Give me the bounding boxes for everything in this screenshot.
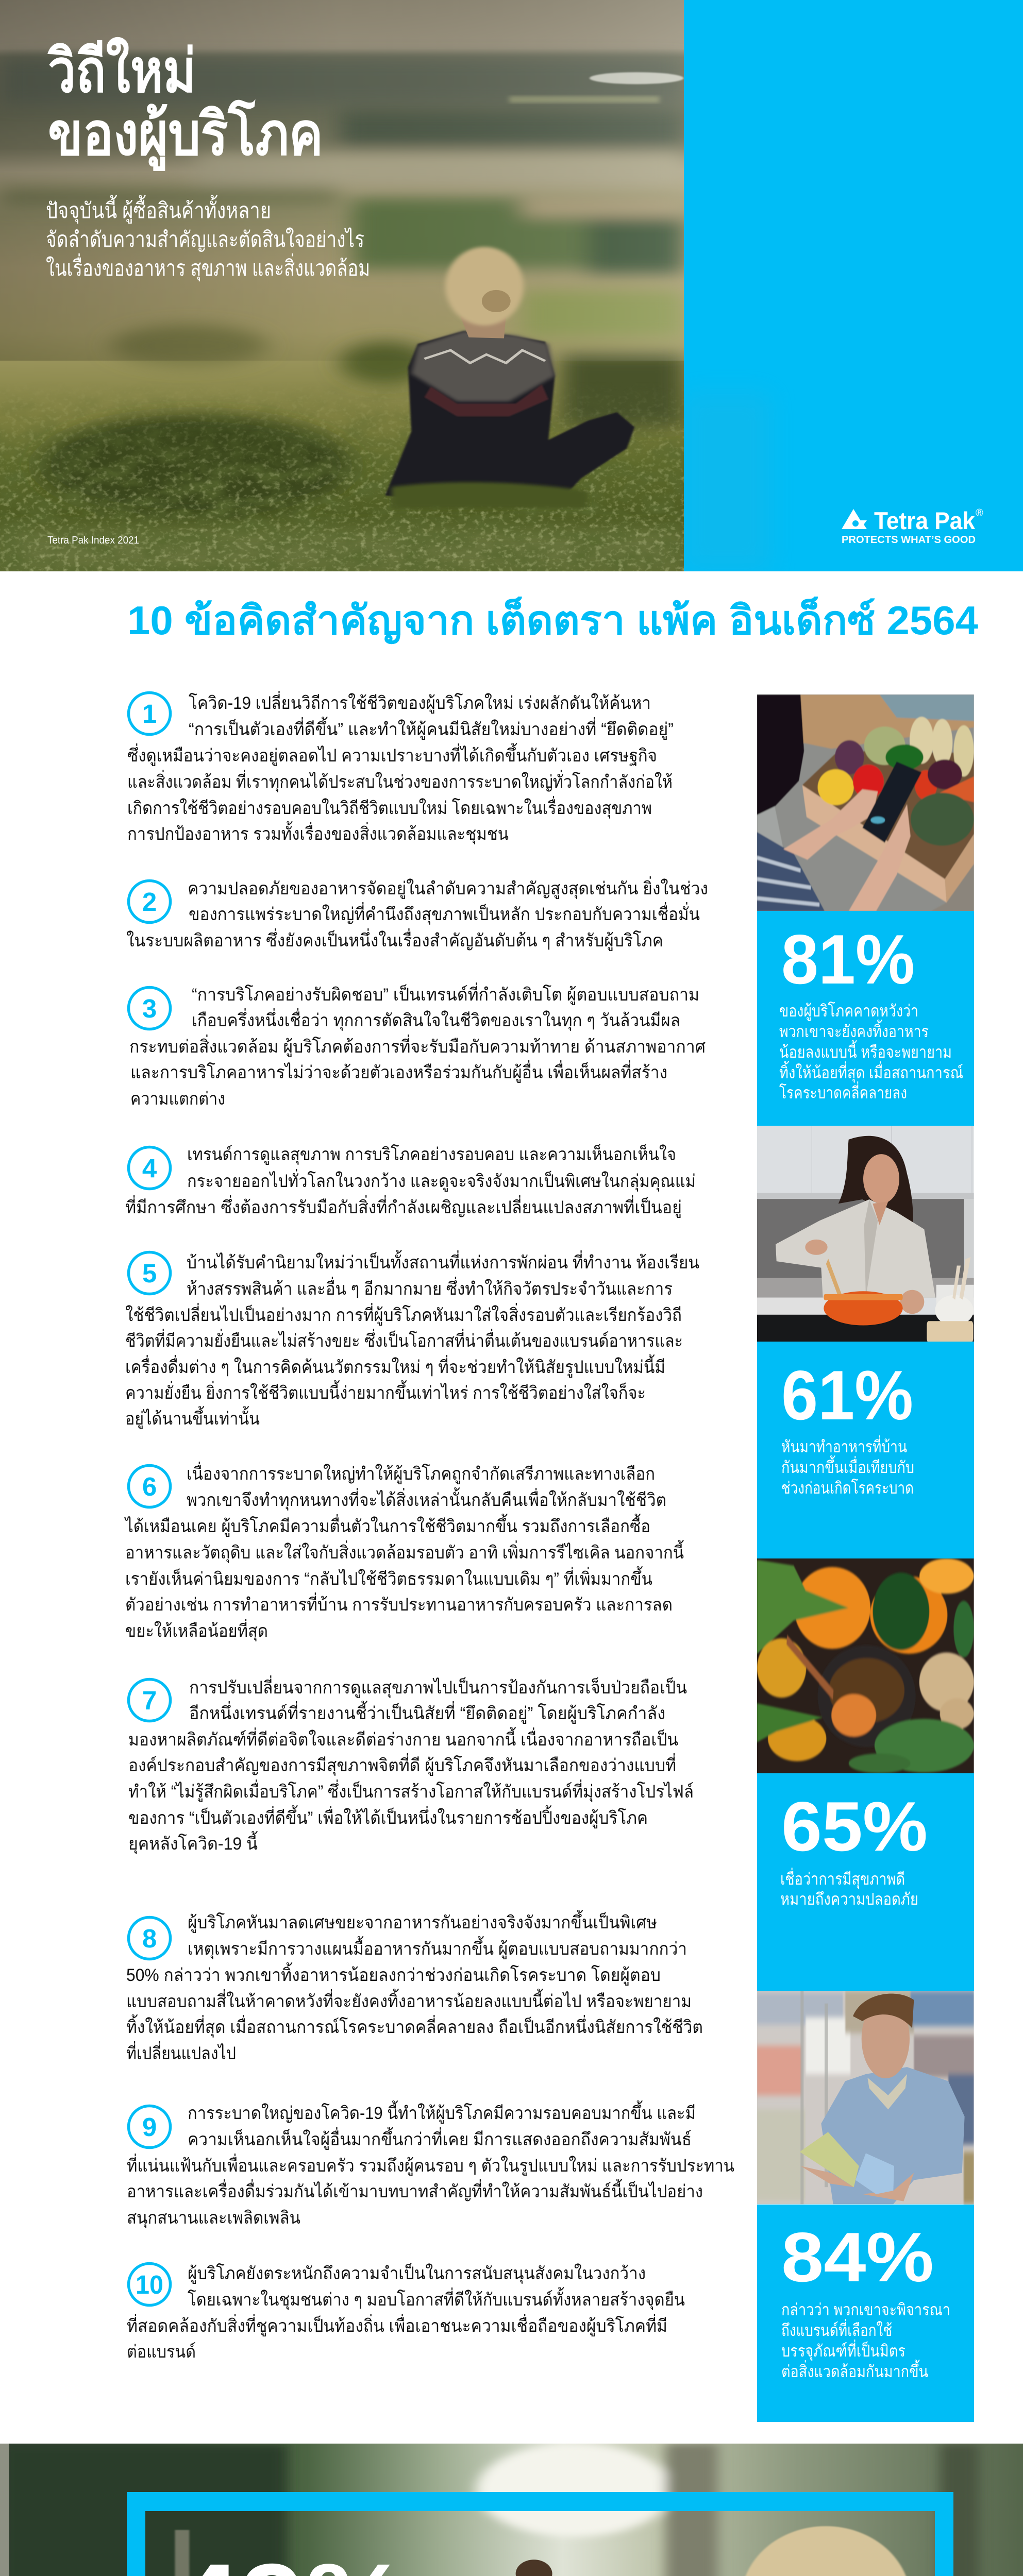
insight 7 (128, 1675, 694, 1854)
bottom photo: mother and children in garden (0, 2444, 1023, 2576)
number badge 10: 10 (136, 2270, 163, 2299)
insight 2 (126, 876, 708, 951)
stat 84%: กล่าวว่า พวกเขาจะพิจารณา (781, 2300, 950, 2319)
insight 7: อีกหนึ่งเทรนด์ที่รายงานชี้ว่าเป็นนิสัยที่ “ยึดติดอยู่” โดยผู้บริโภคกำลัง (189, 1701, 665, 1724)
Tetra Pak logo: ® (976, 507, 983, 519)
number badge 9: 9 (142, 2112, 157, 2142)
insight 7: การปรับเปลี่ยนจากการดูแลสุขภาพไปเป็นการป้องกันการเจ็บป่วยถือเป็น (189, 1675, 687, 1698)
Tetra Pak logo (842, 507, 983, 546)
number badge 2 (129, 881, 170, 922)
insight 1: โควิด-19 เปลี่ยนวิถีการใช้ชีวิตของผู้บริโภคใหม่ เร่งผลักดันให้ค้นหา (189, 691, 651, 714)
number badge 5 (129, 1252, 170, 1294)
insight 4: กระจายออกไปทั่วโลกในวงกว้าง และดูจะจริงจังมากเป็นพิเศษในกลุ่มคุณแม่ (187, 1169, 696, 1192)
hero title: ของผู้บริโภค (48, 99, 323, 171)
insight 9: การระบาดใหญ่ของโควิด-19 นี้ทำให้ผู้บริโภคมีความรอบคอบมากขึ้น และมี (188, 2100, 696, 2124)
source note: Tetra Pak Index 2021 (47, 535, 139, 546)
stat 61%: ช่วงก่อนเกิดโรคระบาด (781, 1479, 914, 1497)
stat 84%: บรรจุภัณฑ์ที่เป็นมิตร (781, 2340, 905, 2361)
Tetra Pak logo: Tetra Pak (874, 507, 976, 534)
insight 6 (124, 1462, 684, 1641)
insight 3: และการบริโภคอาหารไม่ว่าจะด้วยตัวเองหรือร่วมกันกับผู้อื่น เพื่อเห็นผลที่สร้าง (130, 1060, 667, 1083)
stat 81%: 81% (781, 920, 915, 998)
insight 5 (125, 1250, 699, 1429)
stat 81% (757, 911, 974, 1126)
insight 1: เกิดการใช้ชีวิตอย่างรอบคอบในวิถีชีวิตแบบใหม่ โดยเฉพาะในเรื่องของสุขภาพ (127, 796, 652, 819)
stat 65% (757, 1773, 974, 1991)
number badge 4 (129, 1147, 170, 1189)
hero subtitle: ปัจจุบันนี้ ผู้ซื้อสินค้าทั้งหลาย (46, 195, 271, 224)
insight 4 (125, 1144, 696, 1218)
insight 7: มองหาผลิตภัณฑ์ที่ดีต่อจิตใจและดีต่อร่างกาย นอกจากนี้ เนื่องจากอาหารถือเป็น (128, 1727, 678, 1750)
insight 6: ได้เหมือนเคย ผู้บริโภคมีความตื่นตัวในการใช้ชีวิตมากขึ้น รวมถึงการเลือกซื้อ (124, 1514, 650, 1537)
hero photo: woman overlooking countryside (0, 0, 684, 571)
insight 3: กระทบต่อสิ่งแวดล้อม ผู้บริโภคต้องการที่จะรับมือกับความท้าทาย ด้านสภาพอากาศ (129, 1035, 706, 1057)
stat 84%: ถึงแบรนด์ที่เลือกใช้ (781, 2319, 892, 2340)
insight 4: เทรนด์การดูแลสุขภาพ การบริโภคอย่างรอบคอบ และความเห็นอกเห็นใจ (187, 1144, 676, 1165)
insight 3: “การบริโภคอย่างรับผิดชอบ” เป็นเทรนด์ที่กำลังเติบโต ผู้ตอบแบบสอบถาม (192, 982, 699, 1005)
stat 84% (757, 2205, 974, 2422)
stat 81%: พวกเขาจะยังคงทิ้งอาหาร (779, 1020, 929, 1041)
stat 84%: ต่อสิ่งแวดล้อมกันมากขึ้น (781, 2360, 928, 2381)
blue photo frame (127, 2492, 953, 2576)
number badge 4: 4 (142, 1154, 157, 1183)
insight 1 (127, 691, 674, 844)
insight 5: อยู่ได้นานขึ้นเท่านั้น (125, 1406, 260, 1429)
hero subtitle: จัดลำดับความสำคัญและตัดสินใจอย่างไร (46, 227, 364, 252)
insight 10: โดยเฉพาะในชุมชนต่าง ๆ มอบโอกาสที่ดีให้กับแบรนด์ทั้งหลายสร้างจุดยืน (188, 2287, 685, 2310)
insight 8: แบบสอบถามสี่ในห้าคาดหวังที่จะยังคงทิ้งอาหารน้อยลงแบบนี้ต่อไป หรือจะพยายาม (126, 1989, 692, 2011)
stat 65%: หมายถึงความปลอดภัย (780, 1890, 918, 1908)
number badge 5: 5 (142, 1259, 157, 1288)
main heading: 10 ข้อคิดสำคัญจาก เต็ดตรา แพ้ค อินเด็กซ์ 2564 (127, 597, 978, 644)
insight 7: องค์ประกอบสำคัญของการมีสุขภาพจิตที่ดี ผู้บริโภคจึงหันมาเลือกของว่างแบบที่ (128, 1753, 676, 1776)
blue side panel (684, 0, 1023, 571)
hero title (47, 37, 323, 171)
stat 81%: ของผู้บริโภคคาดหวังว่า (779, 1002, 918, 1021)
insight 5: บ้านได้รับคำนิยามใหม่ว่าเป็นทั้งสถานที่แห่งการพักผ่อน ที่ทำงาน ห้องเรียน (187, 1250, 699, 1273)
insight 8: 50% กล่าวว่า พวกเขาทิ้งอาหารน้อยลงกว่าช่วงก่อนเกิดโรคระบาด โดยผู้ตอบ (126, 1962, 661, 1986)
insight 6: เนื่องจากการระบาดใหญ่ทำให้ผู้บริโภคถูกจำกัดเสรีภาพและทางเลือก (187, 1462, 655, 1484)
hero subtitle: ในเรื่องของอาหาร สุขภาพ และสิ่งแวดล้อม (46, 253, 370, 282)
insight 10: ผู้บริโภคยังตระหนักถึงความจำเป็นในการสนับสนุนสังคมในวงกว้าง (188, 2263, 646, 2284)
number badge 7 (129, 1680, 170, 1721)
hero subtitle (46, 195, 370, 282)
insight 3: ความแตกต่าง (130, 1089, 225, 1109)
insight 3: เกือบครึ่งหนึ่งเชื่อว่า ทุกการตัดสินใจในชีวิตของเราในทุก ๆ วันล้วนมีผล (192, 1008, 680, 1031)
insight 9: ความเห็นอกเห็นใจผู้อื่นมากขึ้นกว่าที่เคย มีการแสดงออกถึงความสัมพันธ์ (188, 2127, 692, 2150)
number badge 8 (129, 1918, 170, 1959)
number badge 6: 6 (142, 1472, 157, 1501)
insight 10: ต่อแบรนด์ (127, 2342, 196, 2362)
older girl (741, 2526, 932, 2576)
insight 1: “การเป็นตัวเองที่ดีขึ้น” และทำให้ผู้คนมีนิสัยใหม่บางอย่างที่ “ยึดติดอยู่” (189, 717, 674, 740)
number badge 1: 1 (142, 699, 157, 728)
stat 61% (757, 1342, 974, 1558)
insight 8: เหตุเพราะมีการวางแผนมื้ออาหารกันมากขึ้น ผู้ตอบแบบสอบถามมากกว่า (188, 1936, 687, 1959)
stat 81%: น้อยลงแบบนี้ หรือจะพยายาม (779, 1040, 952, 1061)
insight 6: ตัวอย่างเช่น การทำอาหารที่บ้าน การรับประทานอาหารกับครอบครัว และการลด (125, 1592, 673, 1615)
insight 9: อาหารและเครื่องดื่มร่วมกันได้เข้ามาบทบาทสำคัญที่ทำให้ความสัมพันธ์นี้เป็นไปอย่าง (127, 2179, 703, 2201)
photo: oranges, honey and ginger (757, 1558, 974, 1773)
insight 5: ห้างสรรพสินค้า และอื่น ๆ อีกมากมาย ซึ่งทำให้กิจวัตรประจำวันและการ (187, 1277, 673, 1299)
insight 4: ที่มีการศึกษา ซึ่งต้องการรับมือกับสิ่งที่กำลังเผชิญและเปลี่ยนแปลงสภาพที่เป็นอยู่ (125, 1195, 682, 1218)
insight 7: ทำให้ “ไม่รู้สึกผิดเมื่อบริโภค” ซึ่งเป็นการสร้างโอกาสให้กับแบรนด์ที่มุ่งสร้างโปรไฟล์ (128, 1780, 694, 1802)
stat 65%: 65% (781, 1787, 928, 1866)
insight 8: ที่เปลี่ยนแปลงไป (126, 2041, 236, 2063)
grass texture (0, 401, 684, 571)
Tetra Pak logo: PROTECTS WHAT’S GOOD (842, 534, 976, 546)
stat 81%: ทิ้งให้น้อยที่สุด เมื่อสถานการณ์ (779, 1061, 963, 1083)
photo: woman cooking (757, 1126, 974, 1343)
hero title: วิถีใหม่ (47, 37, 196, 105)
number badge 8: 8 (142, 1924, 157, 1953)
number badge 9 (129, 2106, 170, 2147)
number badge 3: 3 (142, 994, 157, 1023)
insight 9: ที่แน่นแฟ้นกับเพื่อนและครอบครัว รวมถึงผู้คนรอบ ๆ ตัวในรูปแบบใหม่ และการรับประทาน (127, 2154, 734, 2176)
insight 2: ของการแพร่ระบาดใหญ่ที่คำนึงถึงสุขภาพเป็นหลัก ประกอบกับความเชื่อมั่น (189, 902, 700, 925)
number badge 10 (129, 2264, 170, 2305)
mother (515, 2560, 552, 2576)
stat 61%: 61% (781, 1356, 913, 1434)
insight 6: พวกเขาจึงทำทุกหนทางที่จะได้สิ่งเหล่านั้นกลับคืนเพื่อให้กลับมาใช้ชีวิต (187, 1487, 666, 1511)
insight 5: ใช้ชีวิตเปลี่ยนไปเป็นอย่างมาก การที่ผู้บริโภคหันมาใส่ใจสิ่งรอบตัวและเรียกร้องวิถี (125, 1303, 682, 1326)
woman figure (385, 247, 634, 509)
insight 5: เครื่องดื่มต่าง ๆ ในการคิดค้นนวัตกรรมใหม่ ๆ ที่จะช่วยทำให้นิสัยรูปแบบใหม่นี้มี (125, 1354, 665, 1378)
stat 61%: กันมากขึ้นเมื่อเทียบกับ (781, 1455, 914, 1477)
stat 84%: 84% (781, 2218, 934, 2296)
insight 7: ของการ “เป็นตัวเองที่ดีขึ้น” เพื่อให้ได้เป็นหนึ่งในรายการช้อปปิ้งของผู้บริโภค (128, 1805, 648, 1828)
stat 81%: โรคระบาดคลี่คลายลง (779, 1081, 907, 1102)
number badge 7: 7 (142, 1686, 157, 1715)
insight 6: ขยะให้เหลือน้อยที่สุด (125, 1619, 268, 1641)
insight 5: ความยั่งยืน ยิ่งการใช้ชีวิตแบบนี้ง่ายมากขึ้นเท่าไหร่ การใช้ชีวิตอย่างใส่ใจก็จะ (125, 1380, 646, 1403)
insight 6: อาหารและวัตถุดิบ และใส่ใจกับสิ่งแวดล้อมรอบตัว อาทิ เพิ่มการรีไซเคิล นอกจากนี้ (125, 1540, 684, 1563)
insight 8: ทิ้งให้น้อยที่สุด เมื่อสถานการณ์โรคระบาดคลี่คลายลง ถือเป็นอีกหนึ่งนิสัยการใช้ชีวิต (126, 2014, 703, 2038)
insight 8: ผู้บริโภคหันมาลดเศษขยะจากอาหารกันอย่างจริงจังมากขึ้นเป็นพิเศษ (188, 1910, 657, 1933)
number badge 6 (129, 1465, 170, 1507)
insight 1: ซึ่งดูเหมือนว่าจะคงอยู่ตลอดไป ความเปราะบางที่ได้เกิดขึ้นกับตัวเอง เศรษฐกิจ (127, 743, 657, 766)
insight 8 (126, 1910, 703, 2063)
insight 10: ที่สอดคล้องกับสิ่งที่ชูความเป็นท้องถิ่น เพื่อเอาชนะความเชื่อถือของผู้บริโภคที่มี (127, 2314, 667, 2336)
insight 3 (129, 982, 706, 1109)
number badge 2: 2 (142, 887, 157, 917)
insight 9: สนุกสนานและเพลิดเพลิน (127, 2208, 300, 2228)
insight 1: และสิ่งแวดล้อม ที่เราทุกคนได้ประสบในช่วงของการระบาดใหญ่ทั่วโลกกำลังก่อให้ (127, 770, 673, 792)
insight 6: เรายังเห็นค่านิยมของการ “กลับไปใช้ชีวิตธรรมดาในแบบเดิม ๆ” ที่เพิ่มมากขึ้น (125, 1566, 652, 1589)
number badge 3 (129, 987, 170, 1029)
insight 9 (127, 2100, 734, 2228)
insight 5: ชีวิตที่มีความยั่งยืนและไม่สร้างขยะ ซึ่งเป็นโอกาสที่น่าตื่นเต้นของแบรนด์อาหารและ (125, 1329, 683, 1351)
insight 10 (127, 2263, 685, 2362)
insight 7: ยุคหลังโควิด-19 นี้ (128, 1831, 258, 1854)
insight 2: ในระบบผลิตอาหาร ซึ่งยังคงเป็นหนึ่งในเรื่องสำคัญอันดับต้น ๆ สำหรับผู้บริโภค (126, 928, 663, 951)
insight 2: ความปลอดภัยของอาหารจัดอยู่ในลำดับความสำคัญสูงสุดเช่นกัน ยิ่งในช่วง (188, 876, 708, 899)
insight 1: การปกป้องอาหาร รวมทั้งเรื่องของสิ่งแวดล้อมและชุมชน (127, 821, 509, 844)
photo: phone and vegetable box (757, 694, 974, 911)
stat 65%: เชื่อว่าการมีสุขภาพดี (780, 1868, 905, 1889)
number badge 1 (129, 692, 170, 735)
stat 61%: หันมาทำอาหารที่บ้าน (781, 1435, 907, 1456)
photo: man comparing cartons in supermarket (757, 1991, 974, 2204)
